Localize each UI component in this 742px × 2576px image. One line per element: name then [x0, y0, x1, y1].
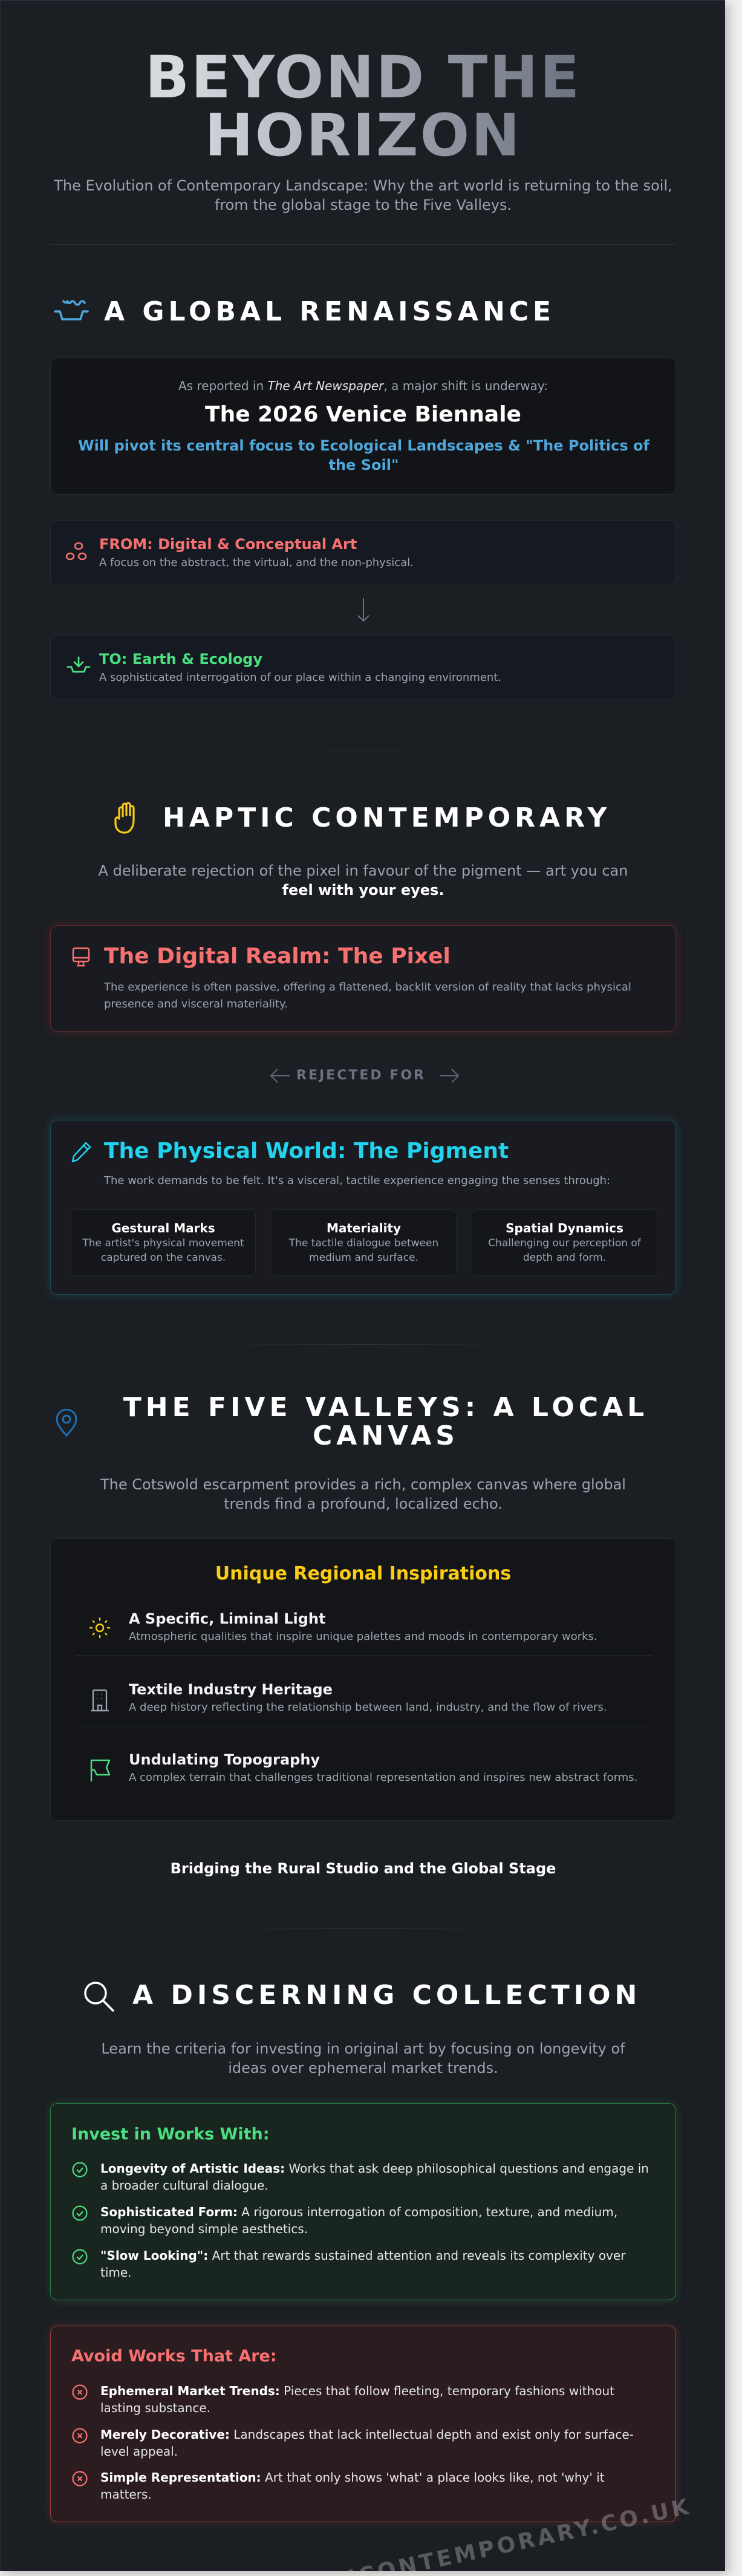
card: spatial dynamics: Spatial Dynamics	[506, 1221, 623, 1235]
card: materiality: Materiality	[327, 1221, 401, 1235]
five valleys subtitle: The Cotswold escarpment provides a rich, complex canvas where global	[100, 1476, 626, 1493]
invest item 2: Sophisticated Form: A rigorous interrogation of composition, texture, and medium, moving beyond simple aesthetics.	[100, 2205, 617, 2236]
to title: TO: Earth & Ecology	[99, 651, 262, 668]
physical description: The work demands to be felt. It's a visceral, tactile experience engaging the senses through:	[104, 1174, 610, 1187]
heading text: CANVAS	[313, 1420, 459, 1451]
five valleys subtitle	[100, 1476, 626, 1512]
icon: pencil	[71, 1142, 91, 1162]
source line: As reported in The Art Newspaper, a major shift is underway:	[178, 379, 548, 393]
title: BEYOND THE	[145, 44, 581, 111]
icon: map pin	[56, 1409, 77, 1437]
card: gestural marks: The artist's physical movement	[82, 1237, 244, 1249]
text: REJECTED FOR	[296, 1068, 426, 1083]
item: textile: Textile Industry Heritage	[129, 1681, 333, 1698]
card: gestural marks: captured on the canvas.	[101, 1252, 226, 1264]
heading text: HAPTIC CONTEMPORARY	[163, 802, 611, 833]
card: materiality	[271, 1209, 457, 1276]
five valleys subtitle: trends find a profound, localized echo.	[224, 1495, 503, 1512]
item: topography	[91, 1751, 637, 1784]
arrow: down	[357, 598, 369, 622]
icon: sun	[89, 1617, 110, 1639]
from description: A focus on the abstract, the virtual, and the non-physical.	[99, 556, 414, 569]
subtitle: from the global stage to the Five Valleys.	[215, 197, 512, 213]
card: gestural marks: Gestural Marks	[111, 1221, 215, 1235]
subtitle: The Evolution of Contemporary Landscape: Why the art world is returning to the soil,	[54, 177, 672, 194]
avoid item 3: Simple Representation: Art that only shows 'what' a place looks like, not 'why' it matters.	[100, 2470, 605, 2502]
icon: flag	[91, 1760, 110, 1781]
icon: magnifier	[84, 1982, 114, 2012]
arrow: right	[440, 1068, 460, 1083]
title: HORIZON	[204, 102, 522, 169]
panel: to earth	[50, 635, 676, 700]
discerning subtitle: Learn the criteria for investing in original art by focusing on longevity of	[101, 2040, 625, 2057]
invest item 1: Longevity of Artistic Ideas: Works that ask deep philosophical questions and engage in a broader cultural dialogue.	[100, 2161, 649, 2193]
item: light: Atmospheric qualities that inspire unique palettes and moods in contemporary works.	[129, 1630, 597, 1643]
haptic subtitle	[98, 862, 628, 899]
to description: A sophisticated interrogation of our place within a changing environment.	[99, 671, 501, 684]
label: rejected for	[270, 1068, 460, 1083]
arrow: left	[270, 1068, 290, 1083]
heading text	[123, 1392, 648, 1451]
item: textile: A deep history reflecting the relationship between land, industry, and the flow of rivers.	[129, 1701, 607, 1714]
discerning subtitle	[101, 2040, 625, 2077]
panel: digital realm	[50, 925, 676, 1032]
title	[1, 48, 726, 164]
panel title: Unique Regional Inspirations	[215, 1563, 511, 1584]
heading: five valleys	[56, 1392, 648, 1451]
heading text: A DISCERNING COLLECTION	[132, 1980, 641, 2011]
card: spatial dynamics	[472, 1209, 657, 1276]
item: textile	[91, 1681, 607, 1714]
discerning subtitle: ideas over ephemeral market trends.	[228, 2060, 498, 2077]
item: topography: Undulating Topography	[129, 1751, 320, 1768]
item: light	[89, 1610, 597, 1643]
icon: hand	[114, 802, 135, 834]
panel: physical world	[50, 1120, 676, 1295]
icon: download tray	[67, 657, 91, 672]
card: gestural marks	[71, 1209, 256, 1276]
card: spatial dynamics: Challenging our perception of	[488, 1237, 641, 1249]
subtitle	[54, 177, 672, 213]
invest title: Invest in Works With:	[71, 2125, 270, 2144]
panel: regional inspirations	[50, 1538, 676, 1821]
avoid item 2: Merely Decorative: Landscapes that lack intellectual depth and exist only for surface-level appeal.	[100, 2427, 634, 2459]
heading text: THE FIVE VALLEYS: A LOCAL	[123, 1392, 648, 1423]
digital title: The Digital Realm: The Pixel	[104, 944, 451, 969]
biennale statement: Will pivot its central focus to Ecological Landscapes & "The Politics of the Soil"	[78, 437, 649, 473]
avoid title: Avoid Works That Are:	[71, 2347, 277, 2366]
panel: venice biennale	[50, 357, 676, 495]
from title: FROM: Digital & Conceptual Art	[99, 536, 357, 553]
icon: shapes	[65, 542, 87, 560]
item: light: A Specific, Liminal Light	[129, 1610, 325, 1627]
panel: avoid	[50, 2326, 676, 2522]
avoid item 1: Ephemeral Market Trends: Pieces that follow fleeting, temporary fashions without lasting substance.	[100, 2384, 614, 2415]
tagline: Bridging the Rural Studio and the Global Stage	[171, 1860, 556, 1877]
card: spatial dynamics: depth and form.	[523, 1252, 606, 1264]
panel: from digital	[50, 520, 676, 585]
physical title: The Physical World: The Pigment	[104, 1139, 509, 1163]
card: materiality: medium and surface.	[309, 1252, 418, 1264]
digital description: The experience is often passive, offering a flattened, backlit version of reality that lacks physical presence and visceral materiality.	[104, 981, 631, 1010]
haptic subtitle: feel with your eyes.	[282, 882, 444, 899]
biennale heading: The 2026 Venice Biennale	[205, 402, 521, 427]
item: topography: A complex terrain that challenges traditional representation and inspires new abstract forms.	[129, 1771, 637, 1784]
haptic subtitle: A deliberate rejection of the pixel in favour of the pigment — art you can	[99, 862, 628, 879]
heading: discerning collection	[84, 1980, 641, 2012]
heading text: A GLOBAL RENAISSANCE	[104, 296, 555, 327]
icon: monitor	[73, 947, 89, 966]
icon: building	[91, 1690, 109, 1711]
icon: boat	[54, 300, 89, 320]
card: materiality: The tactile dialogue between	[289, 1237, 438, 1249]
panel: invest in	[50, 2103, 676, 2300]
heading: a global renaissance	[54, 296, 555, 327]
heading: haptic contemporary	[114, 802, 611, 834]
invest item 3: "Slow Looking": Art that rewards sustained attention and reveals its complexity over time.	[100, 2248, 625, 2280]
